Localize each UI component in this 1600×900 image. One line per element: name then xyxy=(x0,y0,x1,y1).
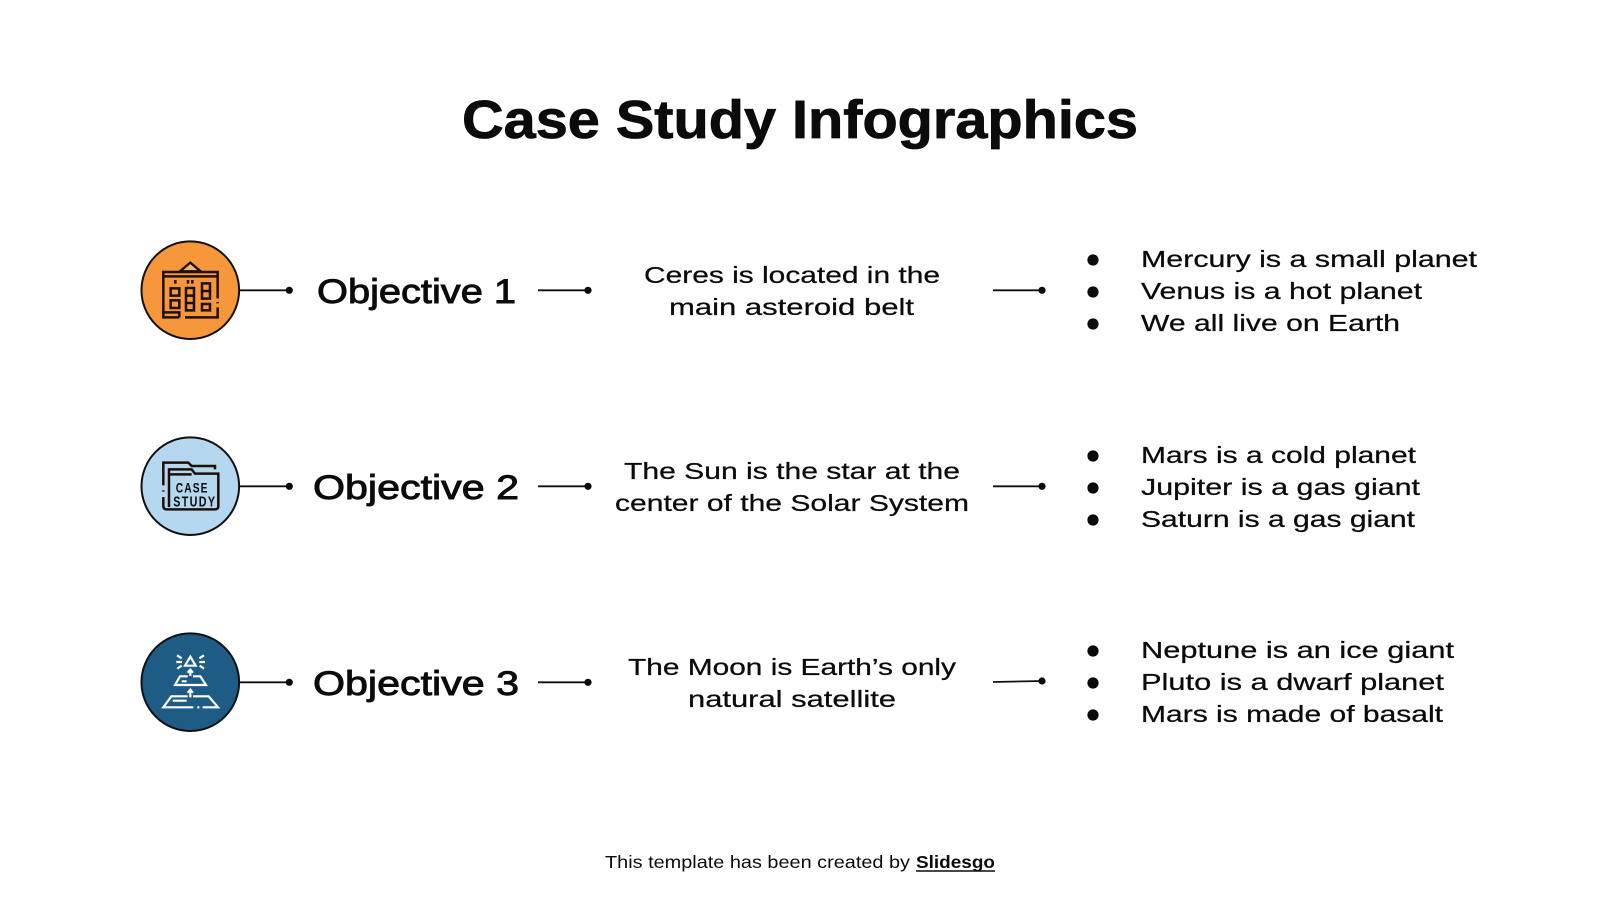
icon: case study folder: CASE xyxy=(176,480,207,496)
list: planets 1: Mercury is a small planet xyxy=(1141,246,1478,272)
connector: objective 3 to description xyxy=(538,679,592,686)
connector: description to list 1 xyxy=(993,287,1046,294)
row: objective 3 xyxy=(142,633,1455,731)
connector: icon to objective 3 xyxy=(239,679,293,686)
text: description 2: center of the Solar System xyxy=(615,490,969,516)
connector: icon to objective 1 xyxy=(239,287,293,294)
list: planets 2: Mars is a cold planet xyxy=(1141,442,1417,468)
connector: icon to objective 2 xyxy=(239,483,293,490)
icon: case study folder xyxy=(142,437,239,535)
list: planets 1: We all live on Earth xyxy=(1141,310,1400,336)
icon: pyramid of goals xyxy=(142,633,239,731)
row: objective 1 xyxy=(142,241,1478,339)
list: planets 3 xyxy=(1087,637,1455,727)
heading: objective 1: Objective 1 xyxy=(317,273,516,311)
list: planets 2: Jupiter is a gas giant xyxy=(1141,474,1421,500)
connector: description to list 2 xyxy=(993,483,1046,490)
text: description 1 xyxy=(644,262,940,320)
text: description 2: The Sun is the star at the xyxy=(624,458,960,484)
icon: building xyxy=(142,241,239,339)
row: objective 2 xyxy=(142,437,1421,535)
connector: objective 1 to description xyxy=(538,287,592,294)
footer credit xyxy=(605,852,995,872)
connector: objective 2 to description xyxy=(538,483,592,490)
list: planets 1: Venus is a hot planet xyxy=(1141,278,1423,304)
list: planets 3: Pluto is a dwarf planet xyxy=(1141,669,1445,695)
text: description 3: The Moon is Earth’s only xyxy=(628,654,956,680)
list: planets 3: Neptune is an ice giant xyxy=(1141,637,1455,663)
list: planets 1 xyxy=(1087,246,1478,336)
text: description 1: Ceres is located in the xyxy=(644,262,940,288)
text: description 2 xyxy=(615,458,969,516)
text: description 3 xyxy=(628,654,956,712)
footer credit: Slidesgo xyxy=(916,852,995,872)
list: planets 2 xyxy=(1087,442,1421,532)
icon: case study folder: STUDY xyxy=(173,494,215,510)
heading: objective 3: Objective 3 xyxy=(313,665,519,703)
text: description 3: natural satellite xyxy=(688,686,896,712)
footer credit: This template has been created by xyxy=(605,852,910,872)
list: planets 3: Mars is made of basalt xyxy=(1141,701,1444,727)
heading: objective 2: Objective 2 xyxy=(313,469,519,507)
connector: description to list 3 xyxy=(993,677,1046,685)
list: planets 2: Saturn is a gas giant xyxy=(1141,506,1416,532)
title: Case Study Infographics xyxy=(462,90,1138,150)
text: description 1: main asteroid belt xyxy=(669,294,915,320)
